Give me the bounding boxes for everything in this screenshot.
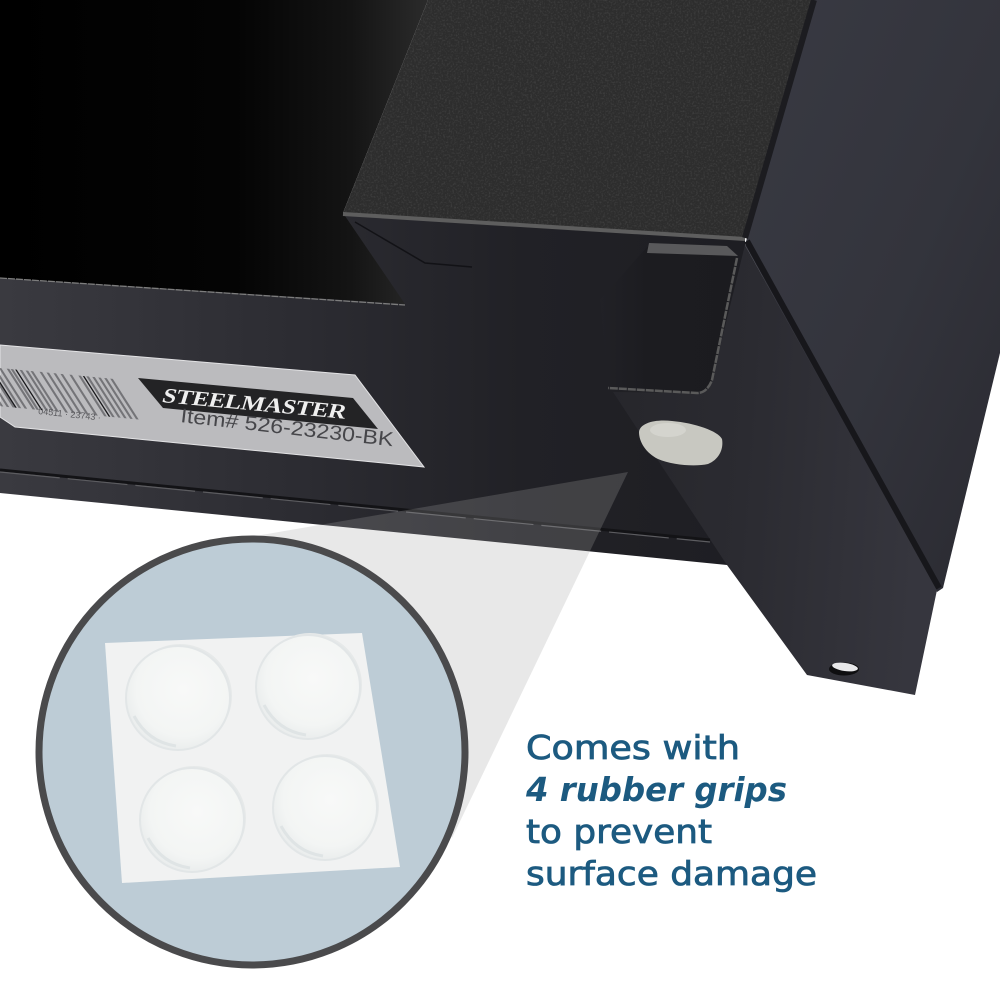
magnified detail circle <box>39 539 465 965</box>
textured top surface <box>340 0 820 240</box>
magnifier cone <box>250 472 628 838</box>
caption text: Comes with <box>526 728 740 767</box>
barcode digits: 04511 · 23743 · <box>38 406 101 423</box>
fold shadow on side panel <box>747 241 939 588</box>
caption text: 4 rubber grips <box>525 770 787 809</box>
logo wordmark: STEELMASTER <box>160 384 351 424</box>
rubber pad 3 <box>140 766 246 872</box>
rubber pad 4 <box>273 754 379 860</box>
item number: Item# 526-23230-BK <box>179 405 395 451</box>
steel organizer photo <box>0 0 1000 695</box>
item label <box>0 345 424 467</box>
angled mounting flange <box>613 245 937 695</box>
right side panel <box>745 0 1000 592</box>
small crease on front <box>355 222 472 267</box>
recessed notch <box>600 243 738 393</box>
caption text <box>525 728 817 893</box>
top panel corner shadow <box>745 0 814 238</box>
rubber grip on product <box>639 420 722 465</box>
logo plate <box>138 378 378 429</box>
mounting screw hole <box>829 661 859 676</box>
rubber pad 1 <box>126 644 232 750</box>
rubber pad 2 <box>256 633 362 739</box>
front face of organizer <box>0 213 745 565</box>
caption text: to prevent <box>526 812 712 851</box>
interior edge line <box>0 278 405 305</box>
dark interior opening <box>0 0 428 304</box>
caption text: surface damage <box>526 854 817 893</box>
barcode <box>0 366 137 419</box>
backing sheet <box>105 633 400 883</box>
bottom seam <box>0 470 710 542</box>
